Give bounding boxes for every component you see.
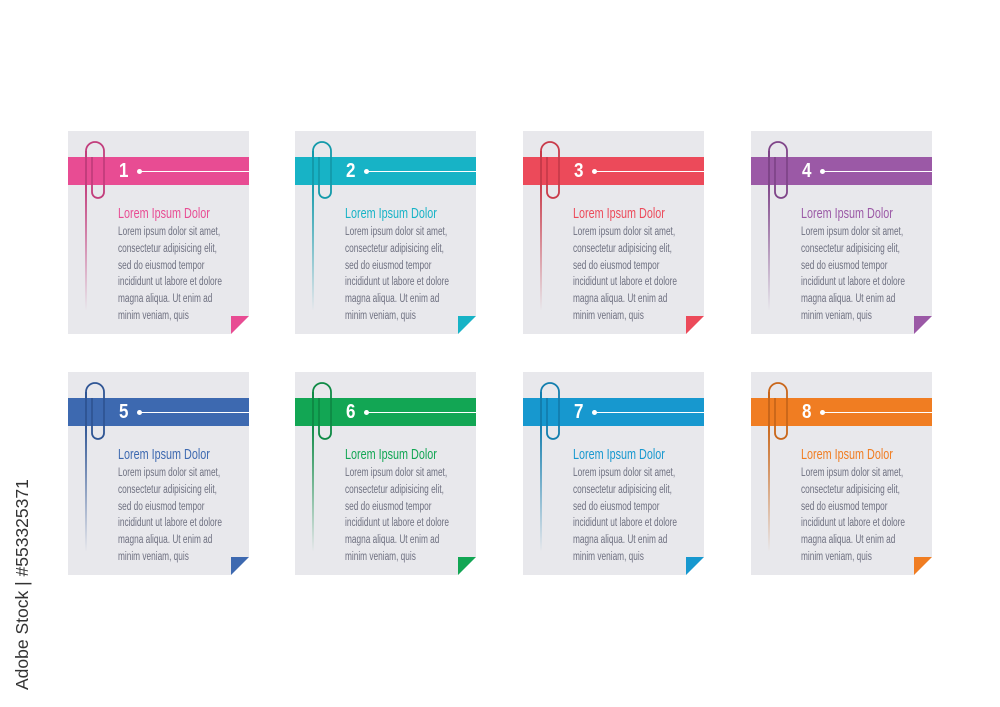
text 7: minim veniam, quis — [573, 551, 644, 563]
text 3: magna aliqua. Ut enim ad — [573, 293, 667, 305]
text 8 — [801, 446, 905, 563]
text 7: sed do eiusmod tempor — [573, 501, 660, 513]
text 4: minim veniam, quis — [801, 310, 872, 322]
band 8 — [751, 398, 932, 426]
text 5: Lorem ipsum dolor sit amet, — [118, 467, 220, 479]
text 8: sed do eiusmod tempor — [801, 501, 888, 513]
number 5: 5 — [119, 401, 128, 423]
band 5 — [68, 398, 249, 426]
text 4: consectetur adipisicing elit, — [801, 243, 900, 255]
text 5 — [118, 446, 222, 563]
text 8: magna aliqua. Ut enim ad — [801, 534, 895, 546]
band 4 — [751, 157, 932, 185]
text 6: consectetur adipisicing elit, — [345, 484, 444, 496]
card 7 — [523, 372, 704, 575]
fold 2 — [458, 316, 476, 334]
text 2: consectetur adipisicing elit, — [345, 243, 444, 255]
text 6: Lorem Ipsum Dolor — [345, 446, 437, 463]
paperclip 8 — [768, 392, 770, 552]
band 7 — [523, 398, 704, 426]
number 4: 4 — [802, 160, 811, 182]
number 6: 6 — [346, 401, 355, 423]
paperclip 5 — [85, 392, 87, 552]
text 8: Lorem Ipsum Dolor — [801, 446, 893, 463]
text 5: magna aliqua. Ut enim ad — [118, 534, 212, 546]
text 4: Lorem Ipsum Dolor — [801, 205, 893, 222]
text 6 — [345, 446, 449, 563]
fold 4 — [914, 316, 932, 334]
text 5: minim veniam, quis — [118, 551, 189, 563]
band 1 — [68, 157, 249, 185]
band 3 — [523, 157, 704, 185]
text 2: minim veniam, quis — [345, 310, 416, 322]
text 6: minim veniam, quis — [345, 551, 416, 563]
fold 8 — [914, 557, 932, 575]
text 6: Lorem ipsum dolor sit amet, — [345, 467, 447, 479]
text 5: sed do eiusmod tempor — [118, 501, 205, 513]
card 2 — [295, 131, 476, 334]
text 3: sed do eiusmod tempor — [573, 260, 660, 272]
band 6 — [295, 398, 476, 426]
text 2 — [345, 205, 449, 322]
fold 7 — [686, 557, 704, 575]
fold 6 — [458, 557, 476, 575]
card 4 — [751, 131, 932, 334]
fold 3 — [686, 316, 704, 334]
text 3 — [573, 205, 677, 322]
text 7: magna aliqua. Ut enim ad — [573, 534, 667, 546]
text 7: consectetur adipisicing elit, — [573, 484, 672, 496]
card 1 — [68, 131, 249, 334]
text 8: minim veniam, quis — [801, 551, 872, 563]
text 7: incididunt ut labore et dolore — [573, 517, 677, 529]
paperclip 4 — [768, 151, 770, 311]
text 1: incididunt ut labore et dolore — [118, 276, 222, 288]
number 7: 7 — [574, 401, 583, 423]
paperclip 6 — [312, 392, 314, 552]
text 1: sed do eiusmod tempor — [118, 260, 205, 272]
text 8: incididunt ut labore et dolore — [801, 517, 905, 529]
watermark text: Adobe Stock | #553325371 — [12, 479, 32, 690]
text 3: consectetur adipisicing elit, — [573, 243, 672, 255]
text 1: magna aliqua. Ut enim ad — [118, 293, 212, 305]
card 3 — [523, 131, 704, 334]
text 4: magna aliqua. Ut enim ad — [801, 293, 895, 305]
text 2: Lorem Ipsum Dolor — [345, 205, 437, 222]
text 5: incididunt ut labore et dolore — [118, 517, 222, 529]
number 3: 3 — [574, 160, 583, 182]
text 5: Lorem Ipsum Dolor — [118, 446, 210, 463]
text 1 — [118, 205, 222, 322]
paperclip 1 — [85, 151, 87, 311]
text 1: consectetur adipisicing elit, — [118, 243, 217, 255]
text 3: minim veniam, quis — [573, 310, 644, 322]
text 5: consectetur adipisicing elit, — [118, 484, 217, 496]
text 7 — [573, 446, 677, 563]
text 3: incididunt ut labore et dolore — [573, 276, 677, 288]
text 2: magna aliqua. Ut enim ad — [345, 293, 439, 305]
number 1: 1 — [119, 160, 128, 182]
paperclip 7 — [540, 392, 542, 552]
card 8 — [751, 372, 932, 575]
text 2: Lorem ipsum dolor sit amet, — [345, 226, 447, 238]
number 8: 8 — [802, 401, 811, 423]
text 4 — [801, 205, 905, 322]
band 2 — [295, 157, 476, 185]
text 1: Lorem ipsum dolor sit amet, — [118, 226, 220, 238]
card 5 — [68, 372, 249, 575]
text 4: incididunt ut labore et dolore — [801, 276, 905, 288]
text 7: Lorem ipsum dolor sit amet, — [573, 467, 675, 479]
paperclip 3 — [540, 151, 542, 311]
text 7: Lorem Ipsum Dolor — [573, 446, 665, 463]
text 6: sed do eiusmod tempor — [345, 501, 432, 513]
fold 1 — [231, 316, 249, 334]
fold 5 — [231, 557, 249, 575]
text 8: consectetur adipisicing elit, — [801, 484, 900, 496]
text 6: incididunt ut labore et dolore — [345, 517, 449, 529]
text 2: sed do eiusmod tempor — [345, 260, 432, 272]
text 6: magna aliqua. Ut enim ad — [345, 534, 439, 546]
text 8: Lorem ipsum dolor sit amet, — [801, 467, 903, 479]
paperclip 2 — [312, 151, 314, 311]
text 2: incididunt ut labore et dolore — [345, 276, 449, 288]
card 6 — [295, 372, 476, 575]
text 1: Lorem Ipsum Dolor — [118, 205, 210, 222]
text 3: Lorem Ipsum Dolor — [573, 205, 665, 222]
text 1: minim veniam, quis — [118, 310, 189, 322]
text 4: Lorem ipsum dolor sit amet, — [801, 226, 903, 238]
text 3: Lorem ipsum dolor sit amet, — [573, 226, 675, 238]
text 4: sed do eiusmod tempor — [801, 260, 888, 272]
number 2: 2 — [346, 160, 355, 182]
